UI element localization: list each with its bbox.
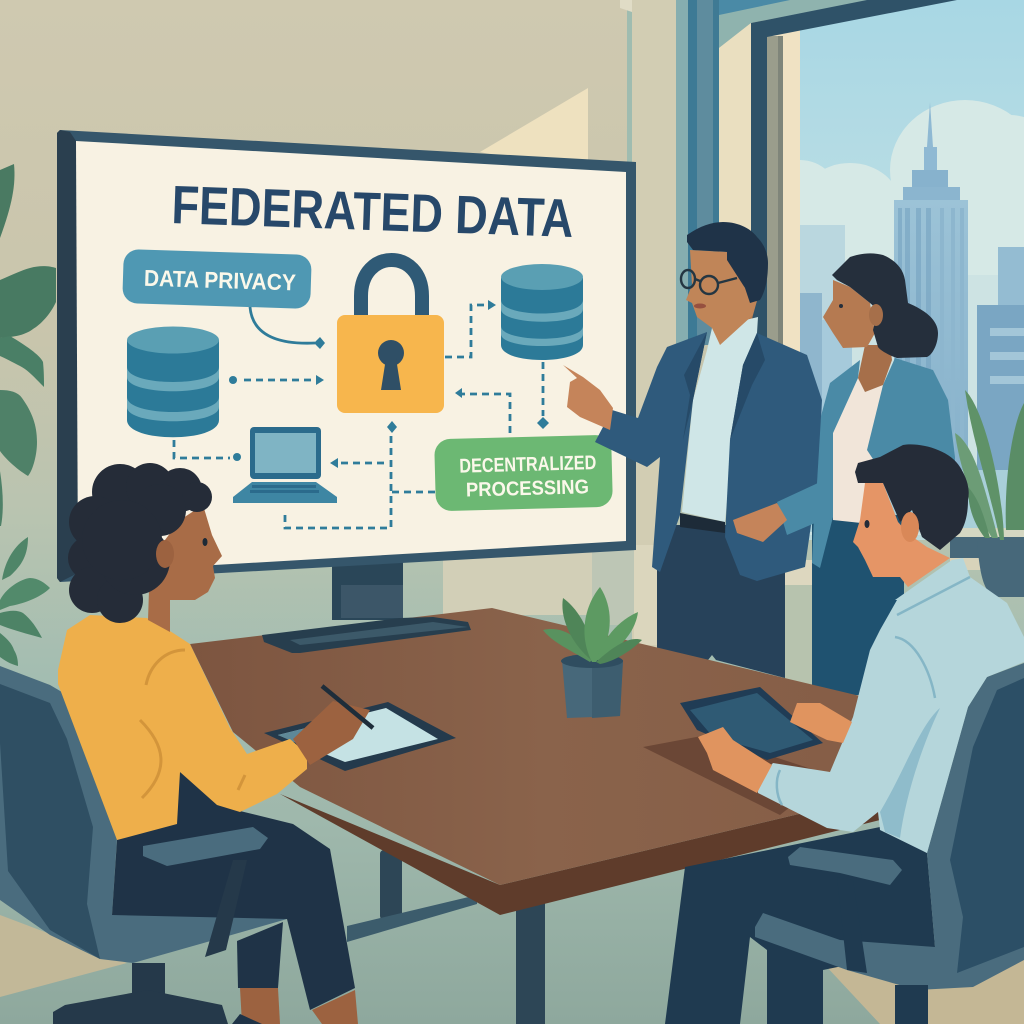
- potted plant by window: [955, 390, 1024, 597]
- table leg back: [380, 850, 402, 920]
- eye: [202, 538, 208, 546]
- table top: [190, 608, 900, 885]
- skyscraper: [894, 102, 968, 520]
- jacket left: [595, 332, 707, 572]
- window frame: [719, 0, 870, 48]
- label: Data Privacy: [122, 249, 312, 309]
- plant: left wall foliage: [0, 164, 56, 666]
- hair: [832, 253, 938, 358]
- label: Data Privacy: DATA PRIVACY: [144, 265, 296, 295]
- tablet: seated man: [680, 687, 823, 760]
- belt: [680, 513, 725, 533]
- armrest post: [205, 860, 247, 957]
- standing man: [563, 222, 822, 678]
- blouse: [833, 378, 883, 525]
- hand: [293, 701, 370, 765]
- hair: [855, 444, 969, 550]
- eye: [839, 304, 843, 308]
- tablet shadow: [643, 735, 830, 815]
- label: Decentralized Processing: PROCESSING: [466, 476, 589, 501]
- shirt: [757, 558, 1024, 853]
- plant on table: [543, 587, 642, 718]
- standing woman: [812, 253, 955, 695]
- screen: [76, 141, 626, 573]
- eye: [864, 520, 870, 528]
- icon: laptop: [233, 427, 337, 503]
- legs: [240, 988, 280, 1024]
- title: Federated Data: FEDERATED DATA: [171, 175, 575, 249]
- face: [686, 250, 760, 345]
- connector markers: [229, 300, 549, 468]
- mouth: [694, 304, 706, 308]
- icon: database left: [127, 326, 219, 437]
- jacket right: [725, 333, 822, 581]
- ear: [901, 512, 919, 542]
- sweater: [58, 615, 307, 840]
- shirt shadow: [880, 708, 940, 838]
- table leg front: [516, 900, 545, 1024]
- woman's sleeve: [777, 483, 818, 535]
- shoe: [232, 1014, 262, 1024]
- clouds: [760, 100, 1024, 275]
- icon: padlock: [337, 260, 444, 413]
- window with skyline: [676, 0, 1024, 570]
- trousers: [812, 515, 904, 695]
- neck and face: [148, 505, 222, 632]
- neck: [712, 315, 753, 362]
- ear: [156, 540, 174, 568]
- table: [190, 608, 900, 1024]
- tablet: seated woman: [264, 702, 456, 771]
- trousers: [657, 525, 785, 678]
- trousers: [237, 922, 283, 988]
- face: [823, 280, 875, 348]
- monitor frame: [57, 130, 636, 582]
- icon: database right: [501, 264, 583, 360]
- trousers: [665, 827, 935, 1024]
- label: Decentralized Processing: [434, 435, 613, 511]
- chair armrest: [143, 827, 268, 866]
- connector lines: [174, 305, 543, 528]
- table front faces: [280, 790, 900, 915]
- head: [853, 483, 950, 587]
- stylus: [322, 686, 373, 728]
- hands: [698, 727, 772, 793]
- monitor base: [262, 617, 471, 653]
- ear: [869, 304, 883, 326]
- shirt folds: [777, 577, 970, 805]
- chair: [755, 663, 1024, 1024]
- monitor: [57, 130, 636, 620]
- shirt: [682, 317, 758, 522]
- table crossbar: [347, 895, 477, 942]
- seated woman: [0, 463, 373, 1024]
- sweater folds: [140, 650, 245, 798]
- seated man: [665, 444, 1024, 1024]
- curly hair: [68, 463, 212, 623]
- window sill: [955, 528, 1024, 538]
- neck: [858, 345, 892, 392]
- hair: [687, 222, 768, 303]
- chair: [0, 666, 287, 1024]
- hand pointing: [563, 365, 613, 430]
- monitor neck: [332, 545, 403, 620]
- glasses: [681, 270, 737, 294]
- lower hand: [733, 503, 787, 542]
- label: Decentralized Processing: DECENTRALIZED: [459, 452, 597, 478]
- blazer: [812, 360, 860, 568]
